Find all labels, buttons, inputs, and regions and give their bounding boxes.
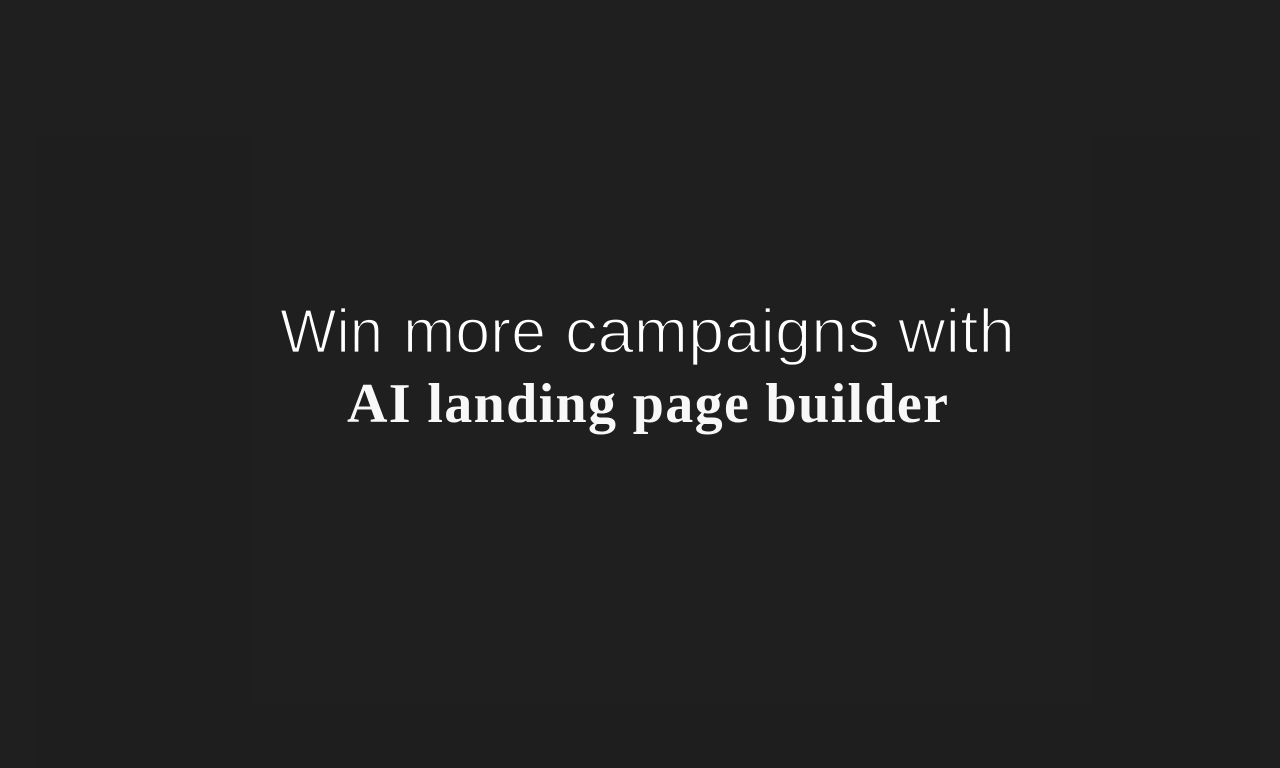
title line one: light weight: with bbox=[897, 298, 1015, 366]
title bbox=[280, 298, 1015, 435]
faint background band bottom bbox=[250, 705, 1090, 768]
title line one: light weight: more bbox=[403, 298, 546, 366]
title line one: light weight: campaigns bbox=[565, 298, 880, 366]
faint background band left bbox=[35, 135, 250, 768]
title line one: light weight bbox=[280, 298, 1015, 366]
title line one: light weight: Win bbox=[280, 298, 383, 366]
title line two: bold serif: AI landing page builder bbox=[347, 373, 948, 435]
faint background band right bbox=[1090, 135, 1262, 768]
